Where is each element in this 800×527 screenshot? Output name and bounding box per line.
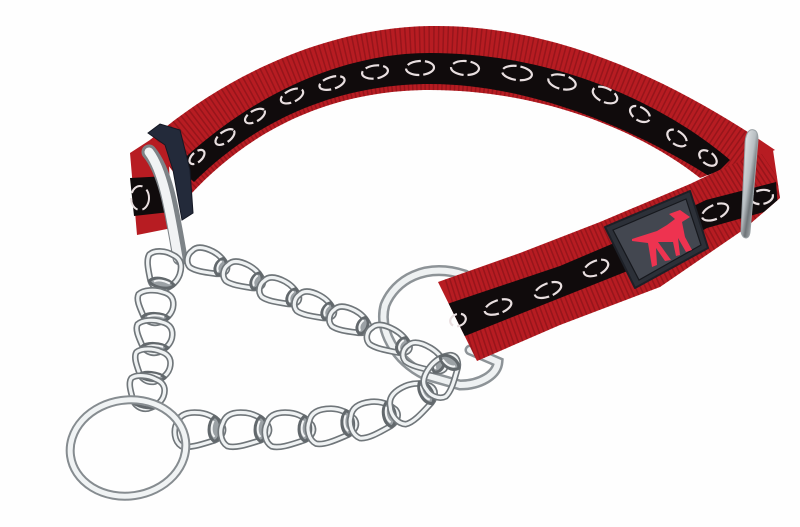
stitched ovals: upper band (187, 60, 720, 169)
rubber dog logo patch (605, 191, 708, 288)
stitched ovals: front band (448, 188, 774, 328)
metal slide buckle (741, 130, 758, 238)
chain: lower horizontal (175, 348, 467, 447)
collar strap: front band (438, 150, 780, 361)
chain: upper diagonal (184, 243, 450, 379)
collar strap: upper band (150, 26, 775, 195)
chain: left vertical (126, 249, 183, 412)
navy keeper loop (148, 124, 193, 220)
D-ring: right (383, 271, 498, 385)
icon: red dog silhouette (632, 210, 692, 267)
collar strap: left end behind ring (130, 140, 172, 235)
D-ring: left (149, 152, 180, 258)
large O-ring (64, 392, 192, 504)
